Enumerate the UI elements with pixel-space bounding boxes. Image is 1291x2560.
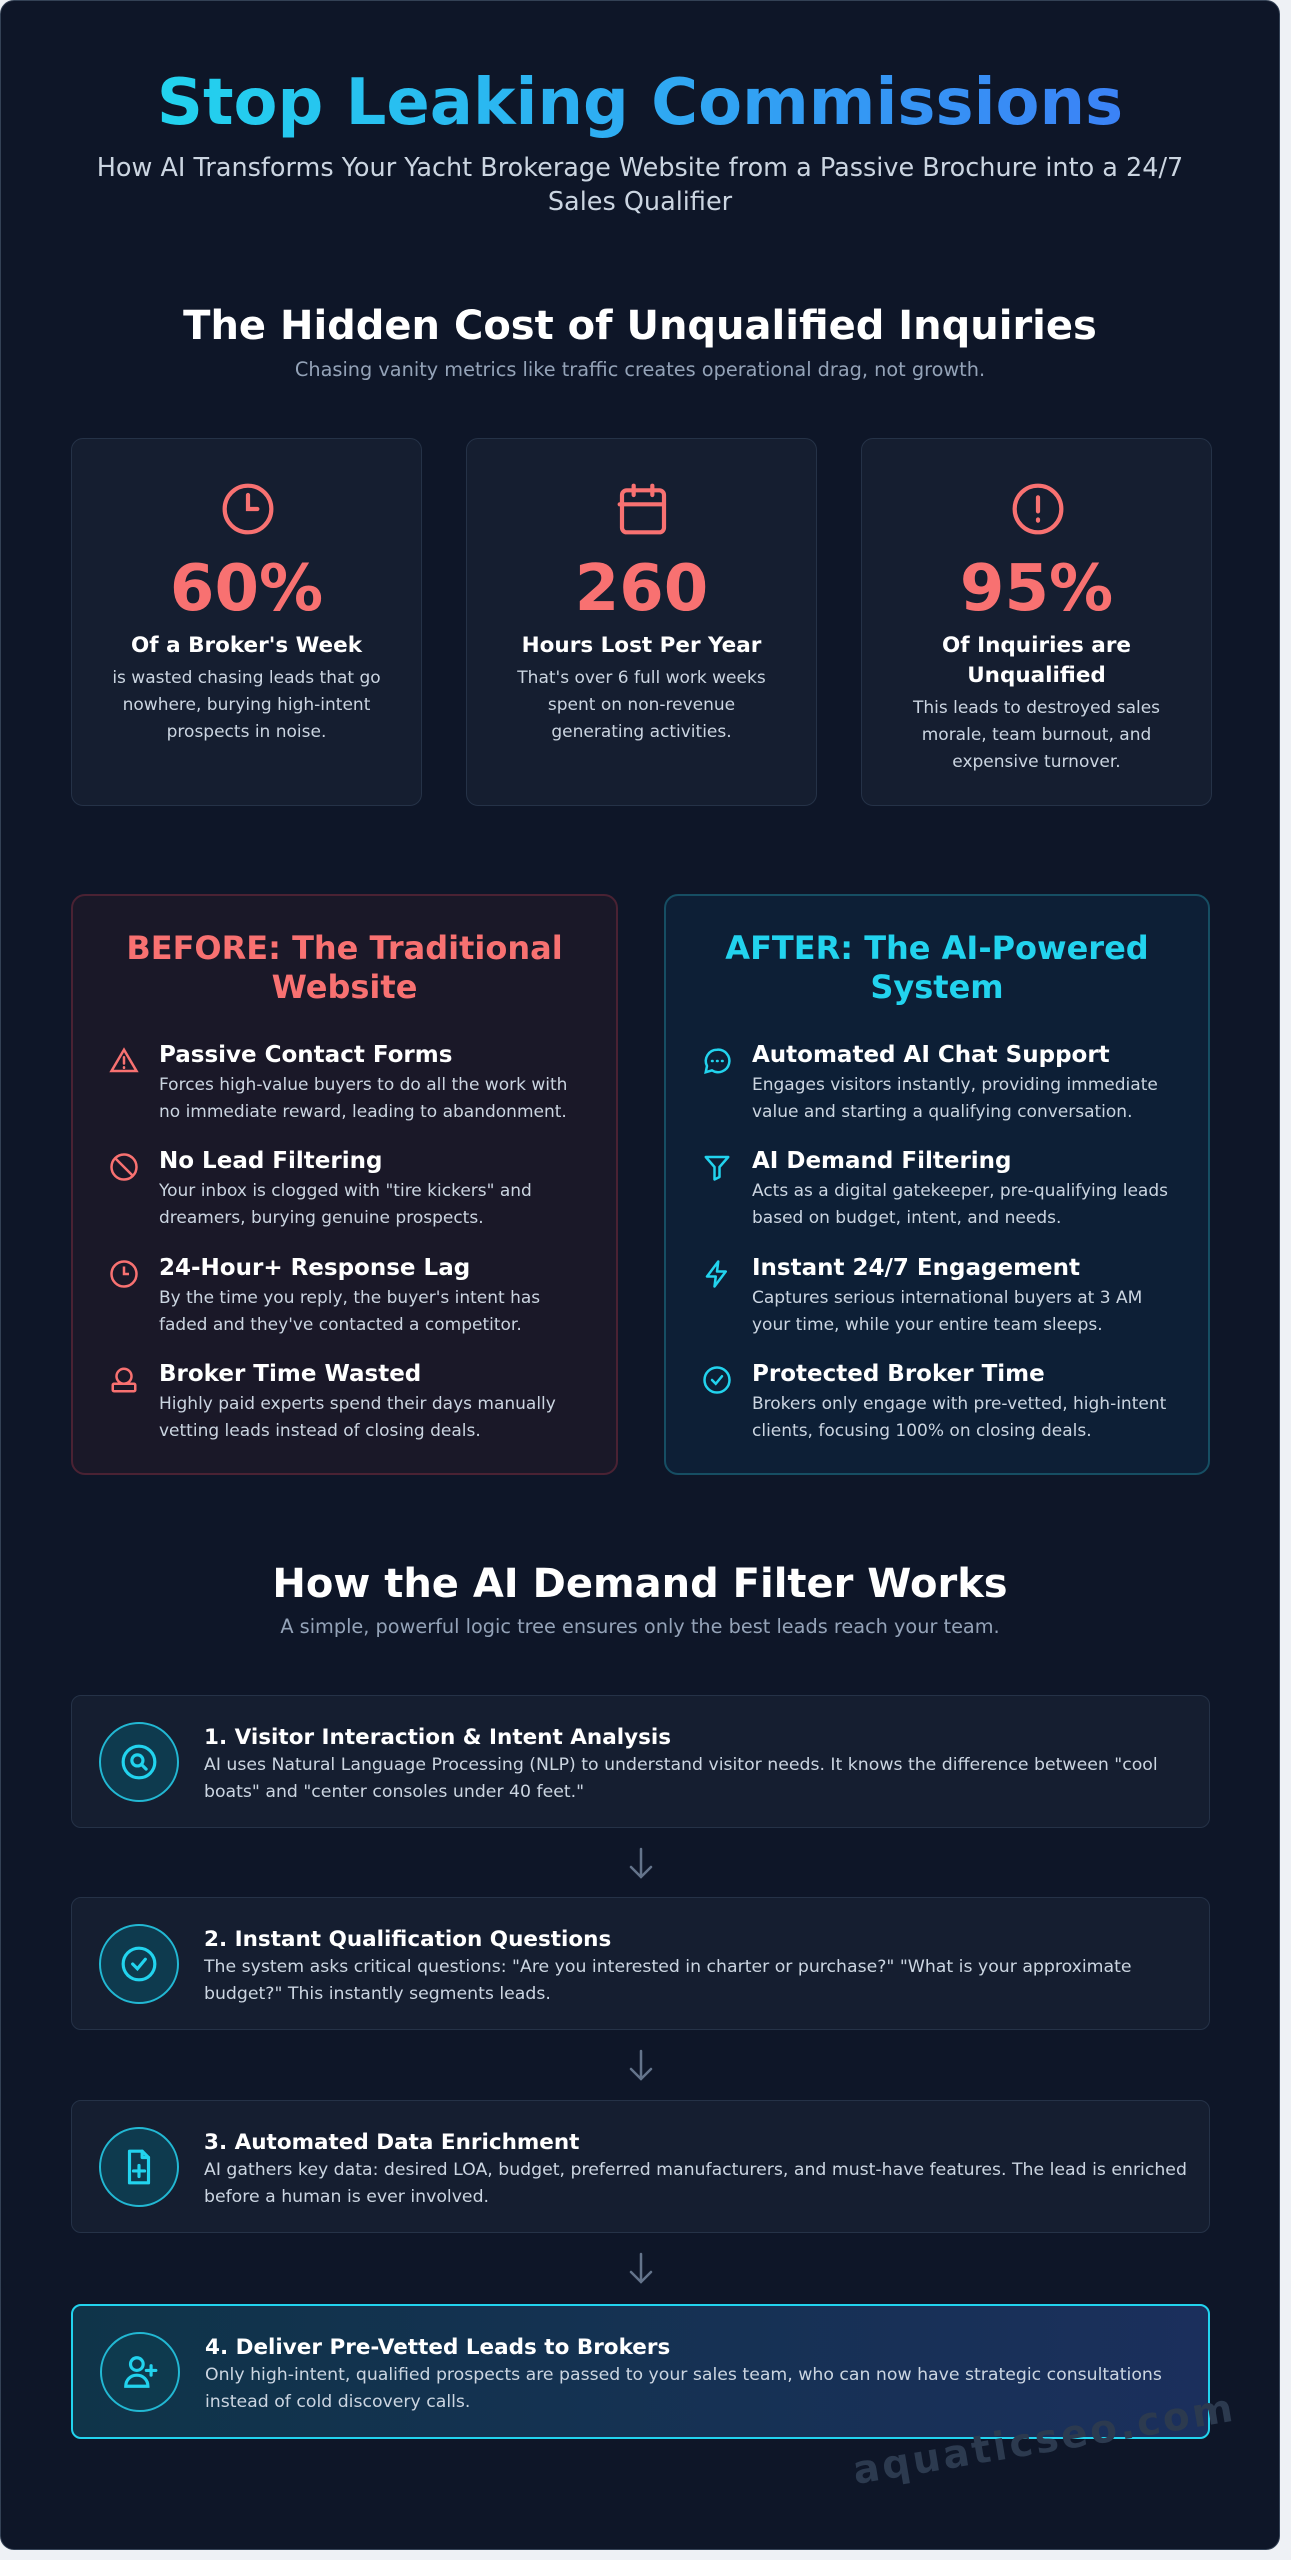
item: chat: [704, 1042, 1158, 1122]
item: no filtering: No Lead Filtering: [159, 1148, 382, 1174]
icon: search: [99, 1722, 179, 1802]
heading: how it works: How the AI Demand Filter Works: [272, 1561, 1008, 1607]
item: passive forms: Passive Contact Forms: [159, 1042, 452, 1068]
item: no filtering: Your inbox is clogged with "tire kickers" and dreamers, burying genuine prospects.: [159, 1181, 532, 1228]
arrow: [630, 1848, 652, 1879]
panel: after: [664, 894, 1210, 1475]
step 1: 1. Visitor Interaction & Intent Analysis: [204, 1725, 671, 1750]
step 2: [71, 1897, 1210, 2030]
item: broker time: [112, 1361, 556, 1441]
stat card 60%: is wasted chasing leads that go nowhere, burying high-intent prospects in noise.: [112, 668, 381, 742]
step 1: AI uses Natural Language Processing (NLP) to understand visitor needs. It knows the difference between "cool boats" and "center consoles under 40 feet.": [204, 1755, 1158, 1802]
subtitle: How AI Transforms Your Yacht Brokerage Website from a Passive Brochure into a 24/7 Sales Qualifier: [97, 153, 1183, 217]
item: broker time: Broker Time Wasted: [159, 1361, 421, 1387]
step 4: [71, 2304, 1210, 2439]
stat card 60%: [71, 438, 422, 806]
step 1: [71, 1695, 1210, 1828]
step 3: AI gathers key data: desired LOA, budget, preferred manufacturers, and must-have features. The lead is enriched before a human is ever involved.: [204, 2160, 1187, 2207]
item: protected: Brokers only engage with pre-vetted, high-intent clients, focusing 100% on closing deals.: [752, 1394, 1166, 1441]
item: protected: Protected Broker Time: [752, 1361, 1045, 1387]
item: instant: [706, 1255, 1142, 1335]
arrow: [630, 2050, 652, 2081]
icon: alert: [1012, 484, 1064, 534]
item: passive forms: Forces high-value buyers to do all the work with no immediate reward, leading to abandonment.: [159, 1075, 567, 1122]
stat card 60%: 60%: [170, 552, 323, 626]
item: lag: [110, 1255, 540, 1335]
item: no filtering: [110, 1148, 532, 1228]
item: protected: [703, 1361, 1166, 1441]
item: instant: Captures serious international buyers at 3 AM your time, while your entire team sleeps.: [752, 1288, 1142, 1335]
title: Stop Leaking Commissions: [157, 66, 1123, 140]
item: lag: By the time you reply, the buyer's intent has faded and they've contacted a competitor.: [159, 1288, 540, 1335]
item: chat: Automated AI Chat Support: [752, 1042, 1110, 1068]
item: filter: Acts as a digital gatekeeper, pre-qualifying leads based on budget, intent, and needs.: [752, 1181, 1168, 1228]
item: broker time: Highly paid experts spend their days manually vetting leads instead of closing deals.: [159, 1394, 556, 1441]
icon: file: [99, 2127, 179, 2207]
subheading: how it works: A simple, powerful logic tree ensures only the best leads reach your team.: [280, 1615, 1000, 1638]
stat card 260: [466, 438, 817, 806]
subheading: hidden cost: Chasing vanity metrics like traffic creates operational drag, not growth.: [295, 358, 985, 381]
stat card 260: That's over 6 full work weeks spent on non-revenue generating activities.: [517, 668, 766, 742]
item: filter: [704, 1148, 1168, 1228]
item: chat: Engages visitors instantly, providing immediate value and starting a qualifying conversation.: [752, 1075, 1158, 1122]
stat card 95%: Of Inquiries are Unqualified: [942, 633, 1131, 688]
icon: check: [99, 1924, 179, 2004]
before heading: BEFORE: The Traditional Website: [126, 929, 563, 1006]
item: filter: AI Demand Filtering: [752, 1148, 1012, 1174]
item: lag: 24-Hour+ Response Lag: [159, 1255, 470, 1281]
after heading: AFTER: The AI-Powered System: [725, 929, 1149, 1006]
step 4: Only high-intent, qualified prospects are passed to your sales team, who can now have strategic consultations instead of cold discovery calls.: [205, 2365, 1162, 2412]
icon: clock: [222, 484, 274, 534]
stat card 95%: This leads to destroyed sales morale, team burnout, and expensive turnover.: [913, 698, 1160, 772]
item: passive forms: [109, 1042, 567, 1122]
watermark: aquaticseo.com: [850, 2386, 1239, 2494]
step 3: [71, 2100, 1210, 2233]
stat card 95%: 95%: [960, 552, 1113, 626]
heading: hidden cost: The Hidden Cost of Unqualified Inquiries: [183, 303, 1097, 349]
icon: user plus: [100, 2332, 180, 2412]
step 4: 4. Deliver Pre-Vetted Leads to Brokers: [205, 2335, 670, 2360]
step 3: 3. Automated Data Enrichment: [204, 2130, 579, 2155]
arrow: [630, 2252, 652, 2284]
stat card 95%: [861, 438, 1212, 806]
stat card 260: 260: [575, 552, 708, 626]
panel: before: [71, 894, 618, 1475]
stat card 60%: Of a Broker's Week: [131, 633, 362, 658]
stat card 260: Hours Lost Per Year: [522, 633, 761, 658]
item: instant: Instant 24/7 Engagement: [752, 1255, 1080, 1281]
step 2: 2. Instant Qualification Questions: [204, 1927, 611, 1952]
step 2: The system asks critical questions: "Are you interested in charter or purchase?" "What is your approximate budget?" This instantly segments leads.: [204, 1957, 1131, 2004]
icon: calendar: [618, 484, 666, 534]
